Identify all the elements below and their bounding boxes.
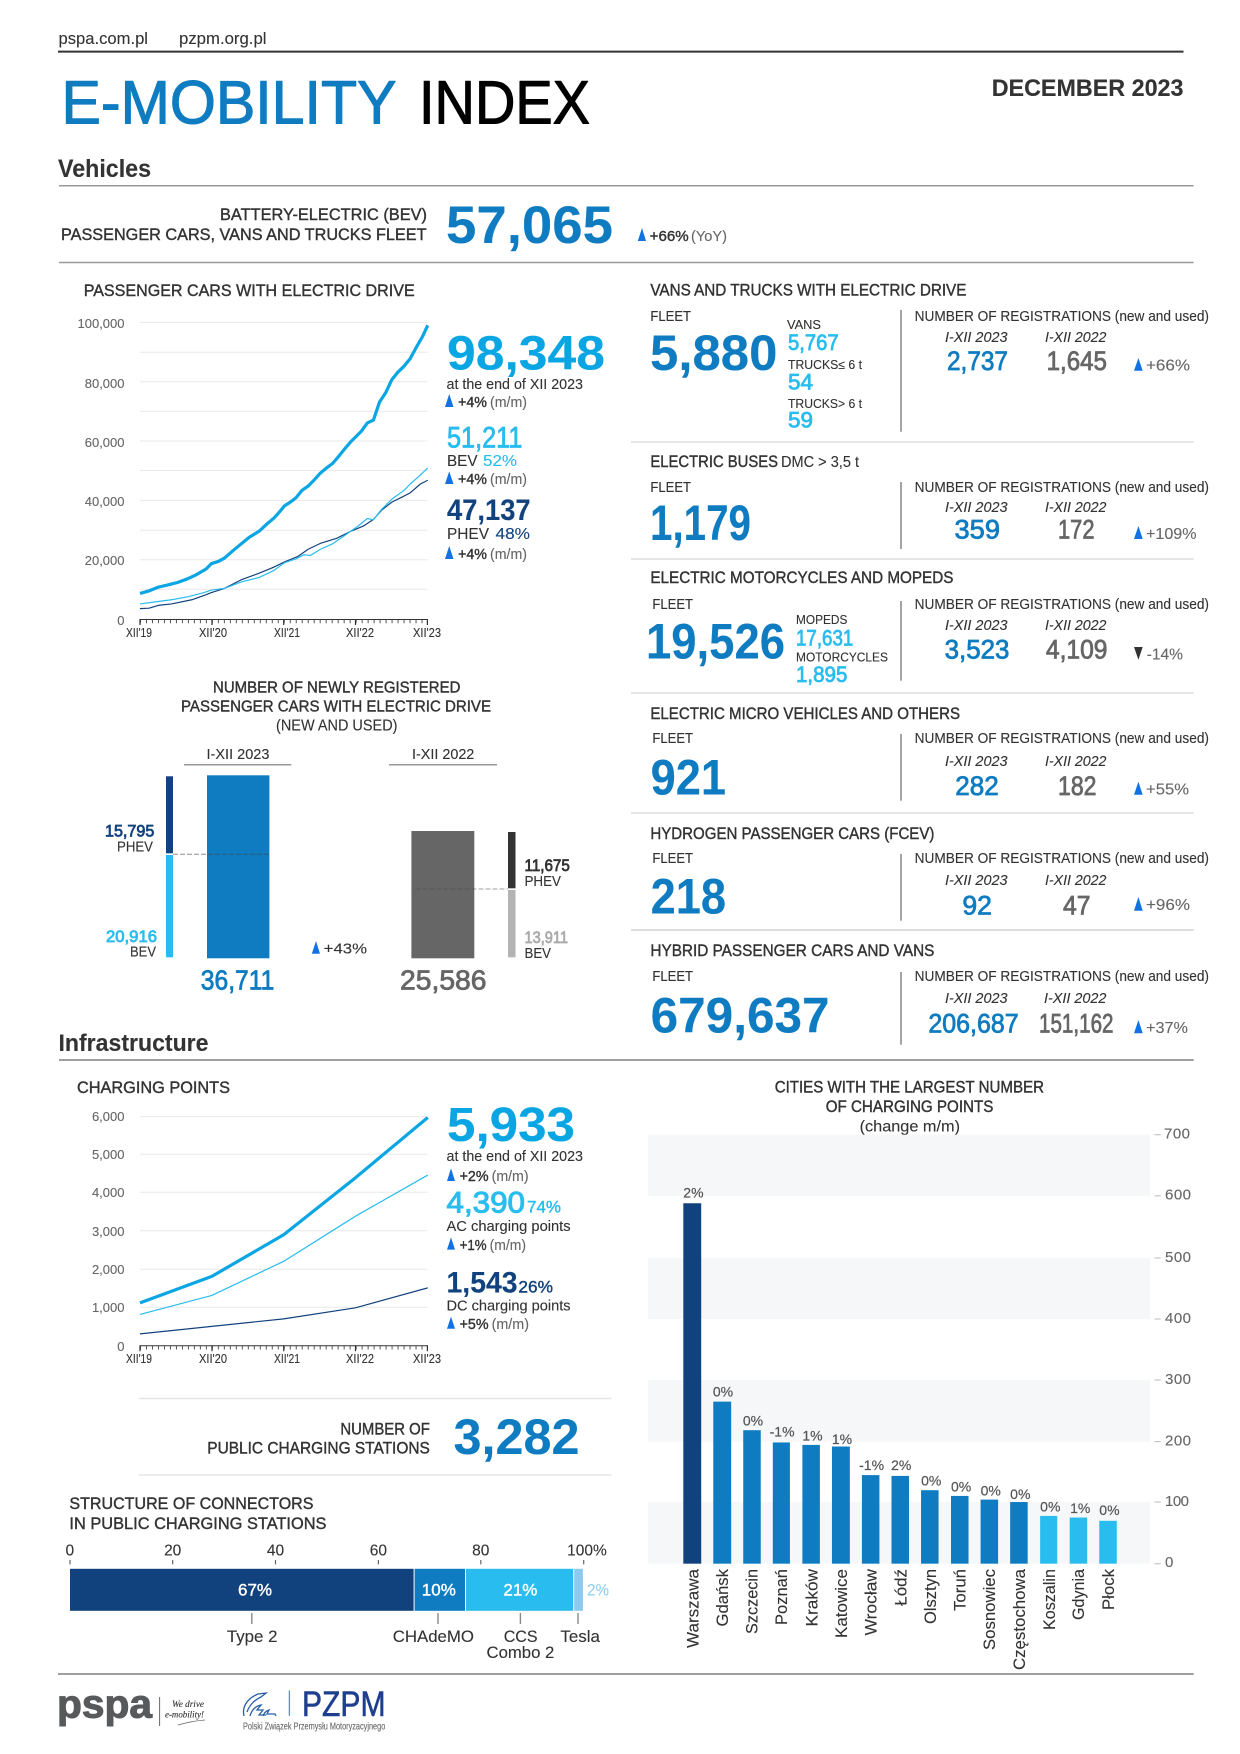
logo: pspa: We drive [172,1700,204,1710]
bar value labels: 2% [891,1457,911,1473]
panel: micro vehicles: I-XII 2022 [1045,753,1107,770]
y axis: 100 [1165,1493,1189,1510]
panel: micro vehicles: 182 [1058,771,1096,801]
line chart: charging points: XII'23 [413,1351,441,1366]
heading: STRUCTURE OF CONNECTORS [69,1494,314,1513]
panel: hybrid cars and vans: I-XII 2023 [945,990,1008,1007]
panel: motorcycles and mopeds: 4,109 [1046,635,1108,665]
AC value: 74% [527,1198,561,1217]
panel: passenger cars with electric drive [78,281,605,640]
panel: micro vehicles: +55% [1146,782,1189,799]
bar value labels: 0% [713,1384,733,1400]
title [62,68,590,136]
bar value labels: 2% [683,1184,704,1200]
heading: PASSENGER CARS WITH ELECTRIC DRIVE [84,281,415,300]
bar value labels: 1% [1070,1500,1090,1516]
panel: hydrogen cars [631,825,1209,930]
column chart: 2022: PHEV [524,873,561,890]
column chart: 2022: 11,675 [524,856,570,875]
stacked bar chart: Tesla [560,1627,601,1646]
panel: vans and trucks: 5,880 [650,325,777,381]
panel: micro vehicles: I-XII 2023 [945,753,1008,770]
stacked bar chart: 21% [503,1580,537,1599]
city labels: Wrocław [862,1568,881,1636]
panel: motorcycles and mopeds: I-XII 2023 [945,617,1008,634]
bar value labels: 1% [802,1427,823,1443]
header links: pzpm.org.pl [179,29,266,48]
bar value labels: 0% [1040,1498,1060,1514]
line chart: passenger cars: 100,000 [78,316,124,331]
total value: 98,348 [447,328,605,380]
city labels: Poznań [772,1569,791,1625]
stacked bar chart: 0 [65,1543,74,1560]
panel: electric buses: +109% [1146,526,1196,543]
panel: motorcycles and mopeds: -14% [1147,647,1183,664]
heading: CHARGING POINTS [77,1078,230,1097]
total value [446,1099,583,1185]
stacked bar chart: 100% [567,1543,607,1560]
heading: OF CHARGING POINTS [826,1098,993,1116]
city labels: Olsztyn [921,1569,940,1624]
panel: BEV fleet headline [59,196,1194,262]
panel: micro vehicles: 282 [955,771,999,801]
city labels: Gdynia [1069,1568,1088,1620]
bar value labels: 0% [981,1482,1001,1498]
panel: hybrid cars and vans: I-XII 2022 [1044,990,1107,1007]
panel: electric buses: DMC > 3,5 t [781,454,859,471]
line chart: passenger cars: 20,000 [85,553,124,568]
panel: motorcycles and mopeds: 17,631 [796,625,853,650]
line chart: passenger cars: XII'19 [126,625,152,640]
panel: vans and trucks: 59 [788,408,813,433]
BEV value: +4% [458,471,487,488]
panel: BEV fleet headline: BATTERY-ELECTRIC (BEV) [220,205,427,224]
panel: vans and trucks: NUMBER OF REGISTRATIONS (new and used) [915,308,1209,325]
panel: hybrid cars and vans: HYBRID PASSENGER CARS AND VANS [650,942,934,960]
panel: electric buses: 1,179 [650,495,751,551]
BEV value [445,421,527,488]
title: E-MOBILITY [62,68,396,136]
line chart: charging points: 0 [117,1339,124,1354]
line chart: passenger cars: 80,000 [85,376,124,391]
panel: electric buses: ELECTRIC BUSES [650,453,778,471]
panel: motorcycles and mopeds: MOPEDS [796,613,847,627]
stacked bar chart: 80 [472,1543,490,1560]
BEV value: (m/m) [490,471,527,488]
city labels: Szczecin [743,1569,762,1634]
column chart: 2023: 20,916 [106,927,157,946]
panel: hybrid cars and vans: FLEET [652,968,693,985]
panel: vans and trucks: VANS [787,318,821,332]
change indicator: +43% [324,941,367,958]
y axis: 0 [1165,1554,1173,1571]
panel: hybrid cars and vans [650,942,1209,1045]
header links [58,29,1184,52]
line chart: passenger cars [78,316,441,640]
line chart: passenger cars: XII'23 [413,625,441,640]
heading [775,1079,1044,1135]
PHEV value: 48% [496,526,530,543]
panel: public charging stations: PUBLIC CHARGING STATIONS [207,1439,430,1457]
panel: micro vehicles: NUMBER OF REGISTRATIONS (new and used) [915,730,1209,747]
panel: motorcycles and mopeds: ELECTRIC MOTORCYCLES AND MOPEDS [650,569,953,587]
panel: charging points [77,1078,583,1366]
line chart: charging points: XII'21 [274,1351,300,1366]
panel: vans and trucks: VANS AND TRUCKS WITH ELECTRIC DRIVE [650,282,966,300]
panel: vans and trucks: I-XII 2022 [1045,329,1107,346]
logo: PZPM: Polski Związek Przemysłu Motoryzacyjnego [243,1720,385,1732]
panel: hybrid cars and vans: +37% [1146,1020,1188,1037]
DC value: 26% [518,1277,553,1296]
panel: BEV fleet headline: 57,065 [446,196,613,255]
BEV value: 52% [483,453,517,470]
bar value labels: 0% [921,1473,941,1489]
city labels: Katowice [832,1569,851,1638]
panel: vans and trucks: 54 [788,370,813,395]
panel: hydrogen cars: NUMBER OF REGISTRATIONS (new and used) [915,850,1209,867]
panel: newly registered passenger cars [105,680,570,995]
stacked bar chart: CHAdeMO [393,1627,474,1646]
line chart: charging points: 4,000 [92,1185,124,1200]
city labels: Kraków [802,1568,822,1627]
heading: IN PUBLIC CHARGING STATIONS [69,1514,327,1533]
city labels: Sosnowiec [980,1569,999,1650]
stacked bar chart: 2% [587,1580,609,1599]
DC value: DC charging points [446,1297,571,1314]
heading: Vehicles: Vehicles [58,155,151,183]
y axis: 700 [1164,1126,1190,1142]
city labels: Warszawa [684,1568,702,1648]
logo: PZPM: PZPM [302,1685,386,1724]
y axis: 600 [1165,1186,1191,1204]
AC value: AC charging points [446,1218,571,1235]
panel: motorcycles and mopeds: 19,526 [646,614,785,670]
AC value [446,1187,571,1254]
panel: hydrogen cars: 47 [1063,890,1090,920]
line chart: charging points: XII'19 [126,1351,152,1366]
city labels: Płock [1099,1569,1118,1610]
bar value labels: -1% [859,1457,884,1473]
total value [445,328,605,411]
panel: motorcycles and mopeds: I-XII 2022 [1045,617,1107,634]
panel: micro vehicles: ELECTRIC MICRO VEHICLES AND OTHERS [650,705,960,723]
panel: micro vehicles: 921 [651,749,726,805]
logo: pspa [57,1682,205,1726]
stacked bar chart: 67% [238,1580,272,1599]
line chart: charging points: 1,000 [92,1300,124,1315]
panel: cities bar chart [648,1079,1191,1670]
bar value labels: 1% [832,1431,852,1447]
heading: NUMBER OF NEWLY REGISTERED [213,680,460,697]
bar value labels: 0% [951,1478,971,1494]
total value: (m/m) [490,394,527,411]
panel: electric buses: I-XII 2023 [945,499,1008,516]
line chart: charging points: XII'20 [199,1351,227,1366]
stacked bar chart: 40 [267,1543,284,1560]
bar value labels: -1% [770,1423,795,1439]
y axis: 400 [1165,1310,1191,1327]
heading: (change m/m) [860,1118,960,1135]
column chart: 2023: 36,711 [201,964,274,995]
stacked bar chart: Type 2 [227,1627,278,1646]
panel: structure of connectors [65,1494,609,1662]
panel: motorcycles and mopeds [631,569,1209,693]
city labels: Toruń [950,1569,969,1611]
panel: public charging stations: NUMBER OF [340,1420,430,1438]
BEV value: BEV [447,453,478,470]
panel: hydrogen cars: HYDROGEN PASSENGER CARS (FCEV) [650,825,934,843]
DC value: +5% [460,1316,489,1333]
column chart: 2022: 25,586 [400,964,486,995]
panel: vans and trucks: I-XII 2023 [945,329,1008,346]
y axis [1154,1126,1191,1571]
panel: hydrogen cars: +96% [1146,897,1190,914]
city labels: Koszalin [1040,1569,1059,1630]
panel: electric buses [631,453,1209,559]
panel: BEV fleet headline: +66% [650,228,689,245]
total value: at the end of XII 2023 [446,1148,583,1165]
panel: hybrid cars and vans: NUMBER OF REGISTRATIONS (new and used) [915,968,1209,985]
column chart: 2022: BEV [524,945,551,962]
column chart: 2023: I-XII 2023 [206,746,269,763]
y axis: 300 [1165,1371,1191,1388]
panel: hybrid cars and vans: 679,637 [651,988,830,1044]
panel: public charging stations [139,1398,611,1475]
total value: 5,933 [447,1099,575,1152]
panel: motorcycles and mopeds: MOTORCYCLES [796,651,888,665]
total value: (m/m) [492,1168,529,1185]
city labels: Łódź [891,1569,910,1606]
panel: hydrogen cars: FLEET [652,850,693,867]
panel: vans and trucks: FLEET [650,308,691,325]
logo: PZPM [243,1685,386,1732]
heading [181,680,491,734]
column chart: 2023 [105,746,291,995]
total value: at the end of XII 2023 [446,376,583,393]
total value: +4% [458,394,487,411]
panel: hybrid cars and vans: 206,687 [928,1009,1019,1039]
stacked bar chart: 20 [164,1543,182,1560]
panel: motorcycles and mopeds: 3,523 [945,635,1010,665]
DC value: 1,543 [446,1266,518,1299]
city labels: Częstochowa [1010,1568,1029,1670]
heading: PASSENGER CARS WITH ELECTRIC DRIVE [181,699,491,716]
line chart: passenger cars: 0 [117,613,124,628]
panel: public charging stations: 3,282 [454,1409,580,1465]
panel: vans and trucks [631,282,1209,442]
heading: CITIES WITH THE LARGEST NUMBER [775,1079,1044,1097]
stacked bar chart [65,1543,609,1662]
column chart: 2023: BEV [130,944,156,961]
line chart: charging points: 2,000 [92,1262,124,1277]
panel: vans and trucks: 5,767 [788,330,839,355]
panel: vans and trucks: TRUCKS≤ 6 t [788,358,863,372]
panel: hydrogen cars: I-XII 2023 [945,872,1008,889]
panel: electric buses: 359 [954,515,1000,545]
column chart: 2023: 15,795 [105,822,154,841]
column chart: 2022 [389,746,570,995]
DC value [446,1266,571,1333]
bar value labels [683,1184,1120,1518]
panel: hydrogen cars: 92 [962,890,992,920]
DC value: (m/m) [492,1316,529,1333]
line chart: passenger cars: XII'22 [346,625,374,640]
line chart: charging points: 3,000 [92,1224,124,1239]
total value: +2% [460,1168,489,1185]
heading [69,1494,327,1533]
header links: pspa.com.pl [58,29,148,48]
panel: hybrid cars and vans: 151,162 [1039,1009,1114,1039]
PHEV value: 47,137 [447,494,531,527]
city labels [684,1568,1118,1670]
bar value labels: 0% [743,1412,763,1428]
panel: electric buses: I-XII 2022 [1045,499,1107,516]
bar value labels: 0% [1099,1502,1120,1518]
panel: hydrogen cars: I-XII 2022 [1045,872,1107,889]
line chart: passenger cars: 60,000 [85,435,124,450]
panel: micro vehicles: FLEET [652,730,693,747]
AC value: +1% [460,1237,487,1254]
footer rule and logos [57,1674,1194,1732]
PHEV value: PHEV [447,526,489,543]
city labels: Gdańsk [713,1569,732,1626]
panel: electric buses: 172 [1058,515,1094,545]
panel: electric buses: FLEET [650,479,691,496]
column chart: 2022: I-XII 2022 [412,746,474,763]
stacked bar chart: CCS [504,1627,538,1646]
panel: hydrogen cars: 218 [651,869,726,925]
heading: (NEW AND USED) [276,718,398,734]
line chart: charging points [92,1109,441,1366]
line chart: passenger cars: XII'20 [199,625,227,640]
panel: BEV fleet headline: PASSENGER CARS, VANS AND TRUCKS FLEET [61,225,426,244]
panel: micro vehicles [631,705,1209,813]
panel: electric buses: NUMBER OF REGISTRATIONS (new and used) [915,479,1209,496]
line chart: passenger cars: 40,000 [85,494,124,509]
PHEV value: +4% [458,546,487,563]
bar value labels: 0% [1010,1486,1030,1502]
date: DECEMBER 2023 [992,75,1184,102]
panel: motorcycles and mopeds: FLEET [652,596,693,613]
PHEV value [445,494,531,563]
stacked bar chart: 10% [422,1580,456,1599]
stacked bar chart: Combo 2 [486,1643,554,1662]
line chart: charging points: XII'22 [346,1351,374,1366]
y axis: 500 [1165,1249,1191,1266]
AC value: (m/m) [490,1237,526,1254]
line chart: charging points: 6,000 [92,1109,124,1124]
logo: pspa: pspa [57,1682,153,1726]
bars [683,1203,1117,1564]
stacked bar chart: 60 [370,1543,387,1560]
panel: vans and trucks: 2,737 [947,346,1008,376]
heading: Infrastructure: Infrastructure [58,1030,208,1057]
title: INDEX [419,68,590,136]
line chart: passenger cars: XII'21 [274,625,300,640]
panel: vans and trucks: 1,645 [1047,346,1107,376]
y axis: 200 [1165,1432,1191,1449]
PHEV value: (m/m) [490,546,527,563]
panel: vans and trucks: TRUCKS> 6 t [788,397,863,411]
panel: motorcycles and mopeds: 1,895 [796,662,847,687]
line chart: charging points: 5,000 [92,1147,124,1162]
column chart: 2022: 13,911 [524,928,568,947]
panel: vans and trucks: +66% [1146,358,1190,375]
BEV value: 51,211 [447,421,522,454]
AC value: 4,390 [446,1187,525,1220]
panel: motorcycles and mopeds: NUMBER OF REGISTRATIONS (new and used) [915,596,1209,613]
column chart: 2023: PHEV [117,839,153,856]
logo: pspa: e-mobility! [165,1710,204,1720]
panel: BEV fleet headline: (YoY) [691,228,727,245]
